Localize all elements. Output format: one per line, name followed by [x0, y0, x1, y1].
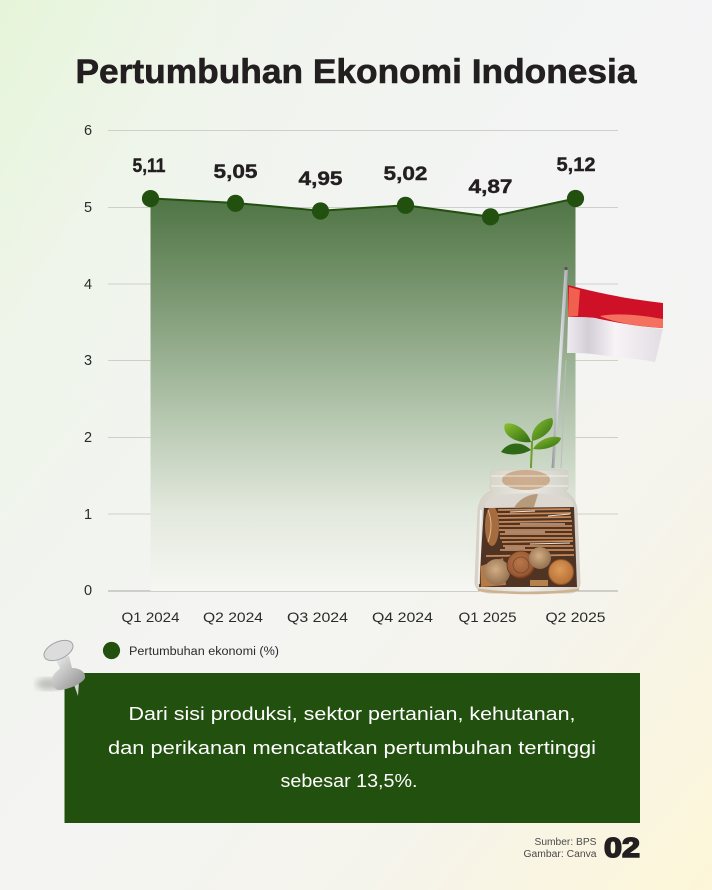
y axis labels: 3 [84, 353, 92, 369]
line chart [84, 123, 618, 625]
icon: Indonesian flag [567, 285, 663, 362]
icon: jar of coins [475, 470, 580, 593]
gridlines [108, 130, 618, 591]
data value labels: 5,12 [556, 155, 596, 176]
icon: push pin [36, 636, 85, 696]
data value labels: 5,05 [214, 162, 258, 183]
icon: seedling [501, 418, 561, 468]
data points [142, 190, 584, 225]
x axis labels [122, 609, 606, 625]
y axis labels: 2 [84, 430, 92, 446]
x axis labels: Q2 2024 [203, 609, 263, 625]
coin stack [479, 507, 577, 587]
callout panel: dan perikanan mencatatkan pertumbuhan tertinggi [108, 738, 596, 758]
data value labels: 4,95 [298, 169, 343, 190]
legend: Pertumbuhan ekonomi (%) [129, 646, 279, 658]
y axis labels: 6 [84, 123, 92, 139]
title: Pertumbuhan Ekonomi Indonesia [76, 53, 638, 91]
y axis labels: 0 [84, 583, 92, 599]
callout panel [64, 673, 640, 823]
data value labels: 5,02 [384, 164, 428, 185]
callout panel: Dari sisi produksi, sektor pertanian, kehutanan, [128, 704, 576, 724]
x axis labels: Q4 2024 [372, 609, 433, 625]
legend [103, 642, 279, 659]
data value labels [132, 155, 596, 198]
y axis labels: 5 [84, 200, 92, 216]
x axis labels: Q3 2024 [287, 609, 348, 625]
y axis labels: 4 [84, 277, 92, 293]
x axis labels: Q1 2024 [122, 609, 180, 625]
icon: flag pole [552, 267, 568, 468]
y axis labels [84, 123, 92, 599]
jar glass [475, 470, 580, 593]
coins [485, 506, 499, 546]
data value labels: 4,87 [468, 177, 512, 198]
source credits: Sumber: BPS [534, 837, 597, 848]
x axis labels: Q2 2025 [546, 609, 606, 625]
x axis labels: Q1 2025 [458, 609, 517, 625]
jar shoulder highlight [484, 493, 574, 508]
callout panel: sebesar 13,5%. [280, 771, 418, 791]
data value labels: 5,11 [132, 156, 166, 177]
y axis labels: 1 [84, 507, 92, 523]
area fill [150, 198, 576, 591]
source credits [524, 837, 597, 860]
source credits: Gambar: Canva [524, 849, 597, 860]
page number: 02 [604, 832, 640, 863]
data line [150, 198, 576, 217]
